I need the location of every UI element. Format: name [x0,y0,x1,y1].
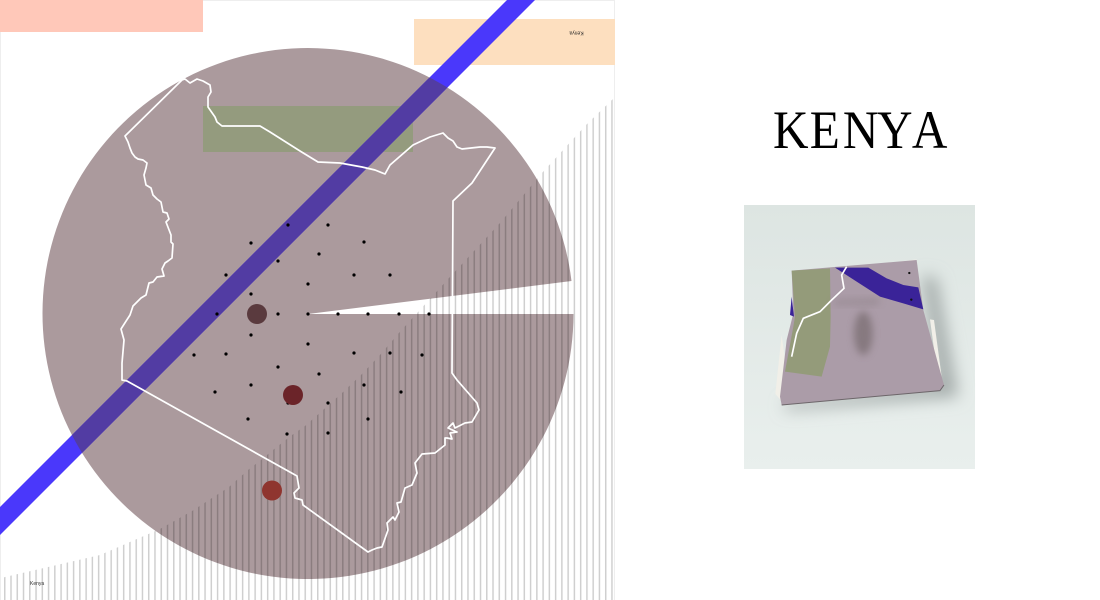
title: KENYA [773,101,947,160]
blue print left [790,297,794,317]
panel: peach rectangle [414,19,615,65]
label: Kenya: Kenya [30,581,44,587]
map: outline of Kenya [121,79,495,552]
marker: dark red circle [283,385,303,405]
label: upside-down Kenya: Kenya [569,30,584,36]
fold across cloth [833,298,880,305]
blue print [835,268,923,309]
marker: red circle [262,480,282,500]
cloth bottom edge [782,385,944,405]
photo: folded printed scarf [744,205,975,469]
photo shadow [783,275,958,410]
folded cloth [780,260,944,405]
chart: large circle with wedge cut out [43,48,574,579]
fabric fringe [775,259,942,400]
panel: pink rectangle [0,0,203,32]
marker: dark brown circle [247,304,267,324]
white border line [792,267,847,357]
chart: vertical stripes under a rising curve [0,90,615,600]
panel: green rectangle [203,106,413,152]
green print [785,268,831,377]
data dots [192,223,431,436]
cloth shading [854,312,873,355]
diagonal blue band [0,0,535,535]
dots on cloth [908,272,912,301]
